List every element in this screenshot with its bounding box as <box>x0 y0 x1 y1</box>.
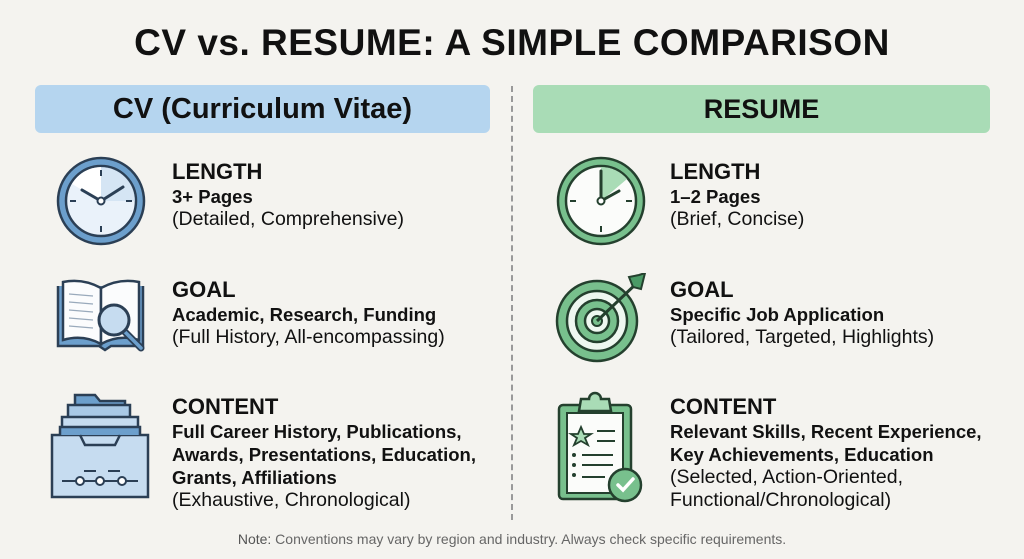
icon: file cabinet <box>50 394 150 498</box>
text: Resume length: (Brief, Concise) <box>670 208 804 230</box>
icon: target <box>556 273 646 362</box>
text: Resume content <box>670 394 982 511</box>
header: CV <box>35 85 490 133</box>
text: CV goal <box>172 277 445 348</box>
text: Resume goal: GOAL <box>670 277 734 302</box>
text: Resume content: CONTENT <box>670 394 776 419</box>
text: CV content: Grants, Affiliations <box>172 467 337 488</box>
text: Resume goal: (Tailored, Targeted, Highlights) <box>670 326 934 348</box>
title: CV vs. RESUME: A SIMPLE COMPARISON <box>134 22 890 63</box>
text: CV content: Awards, Presentations, Education, <box>172 444 476 465</box>
text: CV goal: GOAL <box>172 277 236 302</box>
text: Resume goal <box>670 277 934 348</box>
text: CV content: CONTENT <box>172 394 278 419</box>
header: RESUME: RESUME <box>704 94 819 124</box>
icon: green clock <box>556 156 646 246</box>
text: CV goal: Academic, Research, Funding <box>172 304 436 325</box>
text: CV goal: (Full History, All-encompassing) <box>172 326 445 348</box>
text: Resume goal: Specific Job Application <box>670 304 884 325</box>
text: CV length: (Detailed, Comprehensive) <box>172 208 404 230</box>
header: CV: CV (Curriculum Vitae) <box>113 93 412 125</box>
text: CV length: LENGTH <box>172 159 262 184</box>
text: Resume content: Key Achievements, Education <box>670 444 934 465</box>
text: Resume length: LENGTH <box>670 159 760 184</box>
text: Resume length: 1–2 Pages <box>670 186 761 207</box>
text: CV content: (Exhaustive, Chronological) <box>172 489 410 511</box>
text: Resume content: (Selected, Action-Oriented, <box>670 466 903 488</box>
text: CV length <box>172 159 404 230</box>
text: CV content <box>172 394 476 511</box>
text: Resume content: Relevant Skills, Recent Experience, <box>670 421 982 442</box>
text: CV content: Full Career History, Publications, <box>172 421 462 442</box>
icon: blue clock <box>56 156 146 246</box>
icon: clipboard <box>558 392 642 502</box>
header: RESUME <box>533 85 990 133</box>
text: Resume length <box>670 159 804 230</box>
text: CV length: 3+ Pages <box>172 186 253 207</box>
text: Resume content: Functional/Chronological) <box>670 489 891 511</box>
footnote: Note: Conventions may vary by region and industry. Always check specific requirements. <box>238 531 786 547</box>
icon: book with magnifier <box>56 280 144 352</box>
